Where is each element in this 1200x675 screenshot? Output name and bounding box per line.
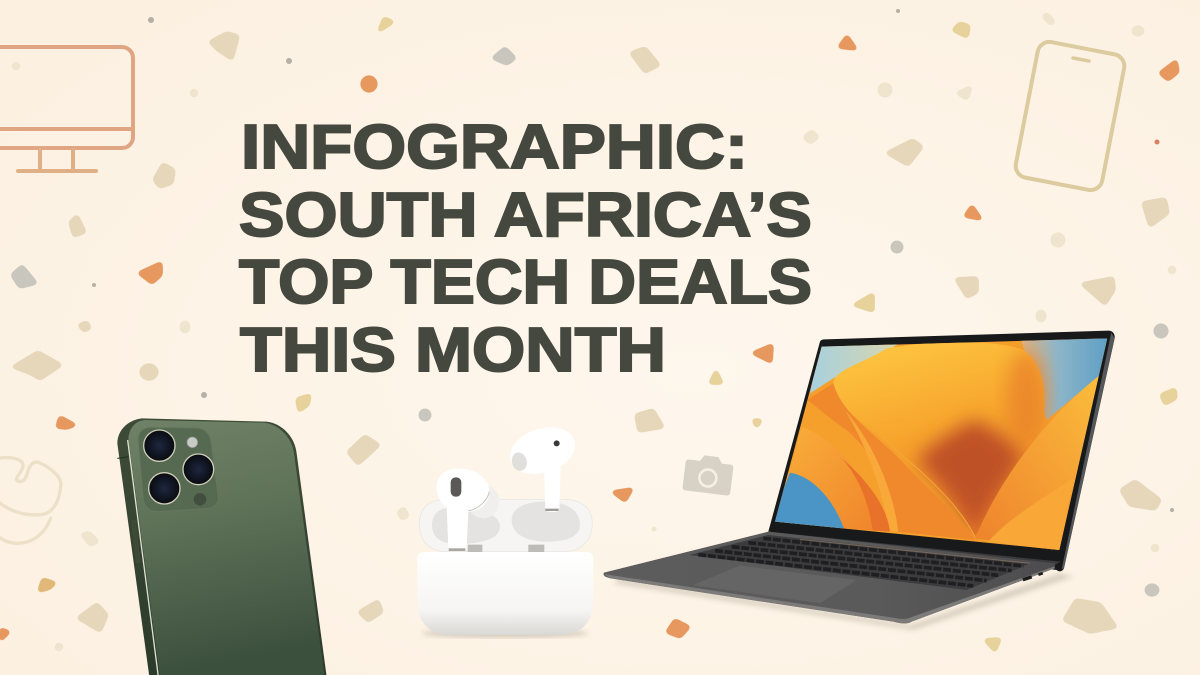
phone edge highlight <box>128 440 158 675</box>
laptop shadow <box>613 573 1073 630</box>
icon: desktop monitor outline <box>0 47 133 171</box>
base deck <box>604 532 1055 623</box>
right petal <box>975 375 1100 551</box>
green smartphone <box>117 418 327 675</box>
blue corner <box>770 473 844 528</box>
keyboard <box>689 535 1031 590</box>
icon: smartphone outline <box>1014 40 1126 192</box>
white wireless earbuds and case <box>417 419 593 637</box>
left earbud <box>437 468 499 551</box>
left well <box>432 507 500 544</box>
wallpaper <box>775 338 1108 550</box>
lens <box>144 430 175 461</box>
icon: camera <box>682 453 734 496</box>
hinges <box>468 545 482 553</box>
side ports <box>1022 575 1032 581</box>
title: THIS MONTH <box>240 316 666 385</box>
sky left <box>810 343 900 393</box>
orange glow behind top right <box>1007 350 1047 443</box>
hinge <box>768 532 1061 565</box>
title: SOUTH AFRICA’S <box>239 181 812 250</box>
soft shadow <box>422 629 588 637</box>
title <box>239 113 812 385</box>
microphone <box>194 493 206 506</box>
title: TOP TECH DEALS <box>239 248 812 317</box>
lens <box>149 473 180 504</box>
laptop <box>604 331 1117 630</box>
central rust fold <box>917 420 1023 537</box>
icon: earbuds case outline <box>0 458 61 543</box>
phone back plate <box>128 420 325 675</box>
lens <box>183 454 214 485</box>
open lid tray <box>419 499 592 552</box>
screen bezel <box>768 331 1115 571</box>
trackpad <box>693 566 857 603</box>
left folds <box>807 383 975 540</box>
phone side frame <box>117 418 327 675</box>
lower case <box>417 552 593 635</box>
right earbud <box>504 419 581 512</box>
title: INFOGRAPHIC: <box>241 113 748 182</box>
front edge <box>604 567 1055 623</box>
camera module <box>138 427 218 512</box>
sky right <box>1020 337 1110 420</box>
flash <box>187 437 198 448</box>
right well <box>512 502 580 542</box>
large yellow shape <box>833 342 1045 537</box>
